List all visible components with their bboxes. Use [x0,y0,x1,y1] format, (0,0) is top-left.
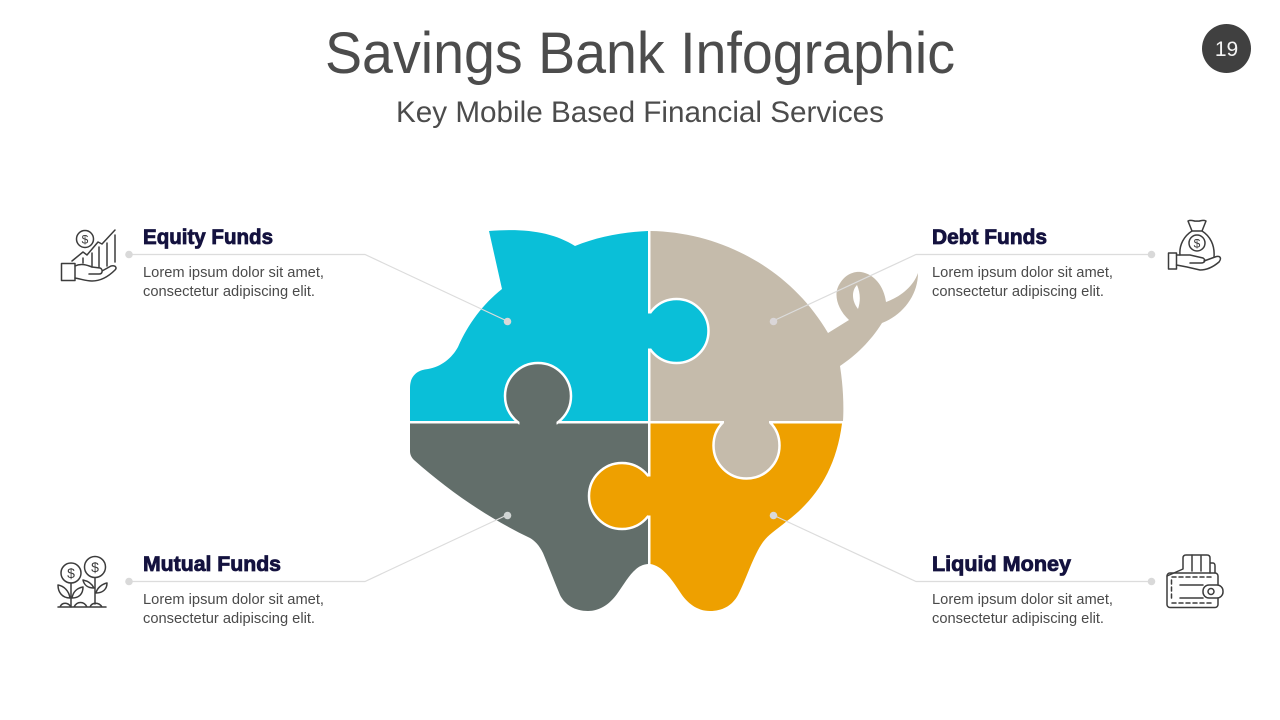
connector: mutual funds [125,512,511,585]
puzzle piece: beige body with tail [650,231,918,421]
icon: money bag in hand [1168,220,1220,270]
connector: liquid money [770,512,1155,585]
puzzle knob: teal [640,299,708,363]
block: liquid money: Liquid Money [932,553,1071,576]
block: debt funds [932,226,1113,300]
block: mutual funds: consectetur adipiscing elit. [143,610,315,627]
subtitle: Key Mobile Based Financial Services [396,96,884,129]
block: debt funds: Debt Funds [932,226,1047,249]
block: liquid money [932,553,1113,627]
page number badge [1202,24,1251,73]
icon: hand with growth chart: $ [82,232,89,246]
title: Savings Bank Infographic [325,21,955,86]
puzzle knob: beige [712,410,781,478]
icon: money plants: $ [67,565,75,581]
icon: wallet [1167,555,1223,608]
puzzle piece: teal head [410,230,648,421]
block: equity funds [143,226,324,300]
block: debt funds: consectetur adipiscing elit. [932,283,1104,300]
block: equity funds: Lorem ipsum dolor sit amet, [143,264,324,281]
icon: money plants [58,556,107,607]
icon: money plants: $ [91,559,99,575]
block: liquid money: consectetur adipiscing elit. [932,610,1104,627]
block: mutual funds: Mutual Funds [143,553,281,576]
connector: equity funds [125,251,511,325]
block: equity funds: Equity Funds [143,226,273,249]
puzzle knob: orange [589,463,658,529]
block: mutual funds [143,553,324,627]
puzzle piece: grey leg [410,424,648,611]
block: mutual funds: Lorem ipsum dolor sit amet, [143,591,324,608]
piggy bank puzzle [410,230,918,611]
puzzle piece: orange leg [650,424,842,611]
page number badge: 19 [1215,38,1238,61]
block: debt funds: Lorem ipsum dolor sit amet, [932,264,1113,281]
block: equity funds: consectetur adipiscing elit. [143,283,315,300]
icon: hand with growth chart [62,230,116,281]
connector: debt funds [770,251,1155,325]
icon: money bag in hand: $ [1194,236,1201,250]
block: liquid money: Lorem ipsum dolor sit amet, [932,591,1113,608]
puzzle knob: grey [504,363,572,432]
